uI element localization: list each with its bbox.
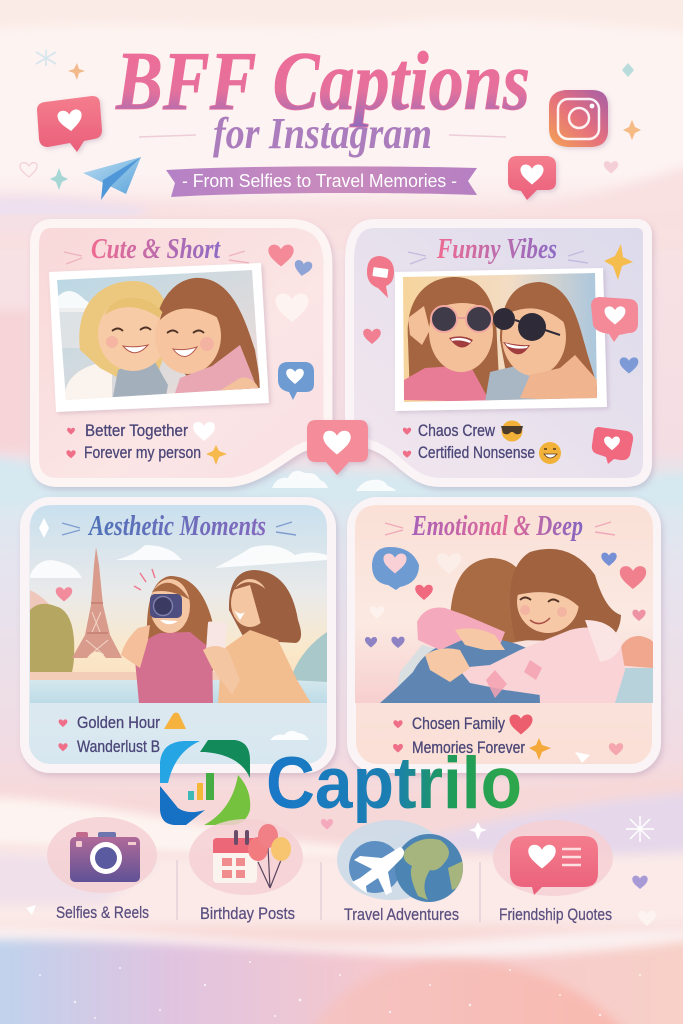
icon: heart pink bbox=[363, 329, 381, 344]
emoji: grinning face bbox=[539, 442, 561, 464]
icon: paper plane bbox=[83, 157, 141, 200]
panel: aesthetic moments bbox=[24, 502, 332, 768]
subtitle: for Instagram bbox=[213, 109, 432, 158]
banner bbox=[166, 166, 477, 197]
icon: instagram bbox=[549, 90, 608, 147]
label: Friendship Quotes bbox=[499, 906, 612, 924]
icon: heart blue bbox=[293, 259, 313, 277]
heading: aesthetic moments: Aesthetic Moments bbox=[87, 511, 266, 542]
heading flourish bbox=[385, 522, 615, 535]
caption list: Forever my person bbox=[84, 444, 201, 462]
cloud bbox=[270, 731, 309, 740]
category: friendship quotes bbox=[493, 820, 613, 924]
panel: emotional and deep bbox=[352, 502, 656, 768]
caption list: Memories Forever bbox=[412, 739, 525, 757]
emoji: sparkle bbox=[206, 445, 227, 465]
title flourish lines bbox=[139, 135, 506, 137]
icon: like bubble left bbox=[37, 96, 102, 152]
caption list: Golden Hour bbox=[77, 714, 160, 732]
logo: captrilo bbox=[160, 740, 522, 825]
speech bubble bbox=[372, 547, 419, 590]
heading flourish bbox=[64, 251, 249, 264]
icon: heart bubble large bbox=[591, 297, 638, 342]
photo frame bbox=[395, 268, 607, 411]
heading flourish bbox=[408, 251, 588, 264]
emoji: white heart bbox=[193, 422, 215, 441]
decorative sparkles bbox=[20, 50, 641, 190]
emoji: red heart bbox=[509, 715, 533, 734]
caption list bbox=[393, 715, 551, 760]
decorative scatter bbox=[26, 816, 656, 926]
photo frame bbox=[49, 263, 269, 412]
photo: friends hugging bbox=[355, 505, 653, 703]
icon: heart pink bbox=[268, 245, 294, 266]
icon: heart white bbox=[276, 293, 308, 322]
icon: blue heart bubble bbox=[278, 362, 314, 400]
emoji: sparkle bbox=[529, 738, 551, 760]
caption list bbox=[66, 422, 227, 465]
icon: star bbox=[604, 244, 633, 280]
photo: friends with sunglasses bbox=[400, 270, 600, 405]
icon: chat bubble bbox=[510, 836, 598, 895]
banner: - From Selfies to Travel Memories - bbox=[182, 171, 457, 191]
emoji: sunset bbox=[164, 712, 186, 729]
heading: emotional and deep: Emotional & Deep bbox=[411, 511, 583, 542]
caption list: Certified Nonsense bbox=[418, 444, 535, 462]
icon: like bubble right bbox=[508, 156, 556, 200]
panel: cute and short bbox=[34, 224, 328, 482]
category: travel adventures bbox=[337, 820, 465, 924]
icon: small like bubble bbox=[592, 427, 633, 464]
clouds between panels bbox=[272, 471, 396, 491]
photo: two friends selfie bbox=[57, 270, 260, 400]
emoji: sunglasses bbox=[501, 420, 523, 442]
caption list bbox=[403, 420, 561, 464]
title: BFF Captions bbox=[115, 35, 530, 128]
category: selfies and reels bbox=[47, 817, 157, 922]
icon: heart blue bbox=[620, 357, 638, 374]
icon: camera bbox=[70, 832, 140, 882]
caption list: Better Together bbox=[85, 422, 188, 440]
logo mark bbox=[160, 740, 250, 825]
icon: central like bubble bbox=[307, 420, 368, 475]
heading flourish bbox=[62, 522, 296, 535]
icon: calendar with balloons bbox=[213, 824, 291, 888]
sparkle bbox=[39, 518, 49, 538]
icon: globes and plane bbox=[349, 834, 465, 902]
heading: cute and short: Cute & Short bbox=[91, 234, 221, 265]
label: Selfies & Reels bbox=[56, 904, 149, 922]
title bbox=[115, 35, 530, 158]
label: Travel Adventures bbox=[344, 906, 459, 924]
wordmark: Captrilo bbox=[266, 743, 522, 824]
panel: funny vibes bbox=[350, 224, 648, 482]
label: Birthday Posts bbox=[200, 905, 295, 923]
heading: funny vibes: Funny Vibes bbox=[436, 234, 557, 265]
photo: friends in paris bbox=[30, 505, 327, 703]
caption list: Wanderlust B bbox=[77, 738, 160, 756]
icon: chat bubble bbox=[367, 256, 394, 298]
caption list: Chosen Family bbox=[412, 715, 506, 733]
caption list: Chaos Crew bbox=[418, 422, 495, 440]
caption list bbox=[58, 712, 186, 756]
category: birthday posts bbox=[189, 819, 303, 923]
decorative hearts bbox=[575, 743, 623, 763]
